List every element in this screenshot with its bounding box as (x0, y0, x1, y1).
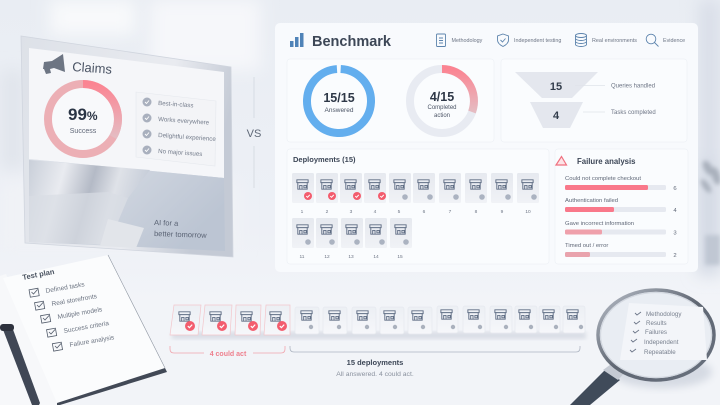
claims checklist: Works everywhere (158, 116, 210, 127)
deployment tiles: 13 (348, 254, 354, 260)
handle (570, 370, 620, 405)
lens checklist: Independent (644, 339, 679, 346)
bracket: 15 deployments: All answered. 4 could act. (336, 371, 414, 378)
lens paper (620, 303, 707, 360)
lens checklist (630, 311, 682, 356)
benchmark heading: Benchmark (312, 34, 392, 50)
sub-panel: funnel (501, 59, 687, 142)
lens checklist: Failures (645, 329, 667, 336)
header badges: Evidence (663, 38, 685, 44)
donut: 99% success: Success (70, 128, 97, 135)
bracket: 4 could act: 4 could act (210, 351, 247, 358)
lens shadow (612, 356, 712, 388)
sub-panel: funnel: 15 (550, 81, 562, 93)
deployment tiles: 3 (350, 209, 353, 215)
deployment tiles: 4 (374, 209, 377, 215)
claims tagline: AI for a (154, 218, 179, 228)
sub-panel: deployments (287, 149, 549, 264)
sub-panel: funnel: 4 (553, 110, 560, 122)
deployment tiles: 9 (501, 209, 504, 215)
failure rows: Authentication failed (565, 198, 618, 204)
deployment tiles: 10 (525, 209, 531, 215)
bracket: 15 deployments (290, 346, 580, 378)
claims checklist: Best-in-class (158, 100, 194, 109)
deployment tiles: 12 (324, 254, 330, 260)
failure rows: Gave incorrect information (565, 221, 634, 227)
failure rows: 2 (673, 253, 677, 259)
header badges (436, 34, 685, 46)
test plan checklist: Real storefronts (51, 293, 98, 308)
bottom tile row (170, 305, 586, 339)
donut: 4/15 completed action: Completed (427, 105, 457, 111)
lens checklist: Methodology (646, 311, 682, 318)
notebook: test plan (0, 255, 167, 405)
test plan checklist (29, 281, 116, 351)
failure rows: 4 (673, 208, 677, 214)
failure rows: 3 (673, 230, 677, 236)
deployment tiles: 8 (475, 209, 478, 215)
deployment tiles: 2 (326, 209, 329, 215)
donut: 4/15 completed action: action (434, 113, 450, 119)
test plan heading: Test plan (22, 267, 56, 282)
deployment tiles: 15 (397, 254, 403, 260)
failure rows (565, 176, 677, 259)
claims checklist: No major issues (158, 148, 203, 158)
header badges: Independent testing (514, 38, 561, 44)
deployment tiles: 7 (449, 209, 452, 215)
deployment tiles: 1 (301, 209, 304, 215)
lens checklist: Repeatable (644, 349, 676, 356)
lens (598, 290, 714, 380)
sub-panel: donuts (287, 59, 494, 142)
donut: 15/15 answered: Answered (325, 107, 354, 114)
magnifying glass (570, 290, 714, 405)
claims tagline: better tomorrow (154, 229, 207, 240)
deployment tiles: 5 (398, 209, 401, 215)
sub-panel: funnel: Tasks completed (611, 110, 656, 116)
header badges: Methodology (452, 38, 483, 44)
vs divider (247, 77, 261, 188)
test plan checklist: Multiple models (57, 306, 104, 321)
test plan checklist: Success criteria (63, 320, 110, 335)
failure heading: Failure analysis (577, 157, 636, 166)
donut: 99% success: 99% (68, 105, 98, 124)
donut: 4/15 completed action: 4/15 (430, 90, 454, 104)
donut: 4/15 completed action (410, 69, 474, 133)
test plan checklist: Defined tasks (45, 281, 86, 295)
failure rows: Timed out / error (565, 243, 608, 249)
claims checklist (136, 92, 217, 166)
donut: 15/15 answered (305, 67, 373, 135)
claims tagline (154, 218, 207, 240)
claims glass frame (21, 36, 233, 257)
bracket: 4 could act (170, 346, 285, 358)
deployment tiles: 11 (300, 254, 305, 260)
tile shadows (172, 332, 586, 339)
deployment tiles: 6 (423, 209, 426, 215)
claims upper card (29, 48, 224, 178)
panel: claims (21, 36, 233, 257)
donut: 99% success (48, 84, 118, 154)
vs divider: VS (247, 128, 261, 140)
pen (0, 324, 40, 405)
bracket: 15 deployments: 15 deployments (347, 358, 403, 367)
deployment tiles: 14 (373, 254, 379, 260)
panel: benchmark (275, 23, 698, 272)
sub-panel: failure analysis (555, 149, 688, 264)
icon: warning triangle (556, 156, 566, 165)
icon: bar chart (290, 33, 304, 47)
failure rows: Could not complete checkout (565, 176, 641, 182)
icon: megaphone (43, 54, 65, 74)
claims chrome lower (29, 159, 225, 251)
claims checklist: Delightful experience (158, 132, 217, 143)
background plant (699, 159, 720, 265)
deployment tiles (292, 173, 539, 260)
header badges: Real environments (592, 38, 637, 44)
lens checklist: Results (646, 320, 667, 327)
test plan checklist: Failure analysis (69, 334, 116, 349)
deployments heading: Deployments (15) (293, 155, 356, 164)
claims heading: Claims (72, 59, 113, 77)
sub-panel: funnel: Queries handled (611, 84, 655, 90)
failure rows: 6 (673, 186, 677, 192)
donut: 15/15 answered: 15/15 (323, 91, 355, 105)
